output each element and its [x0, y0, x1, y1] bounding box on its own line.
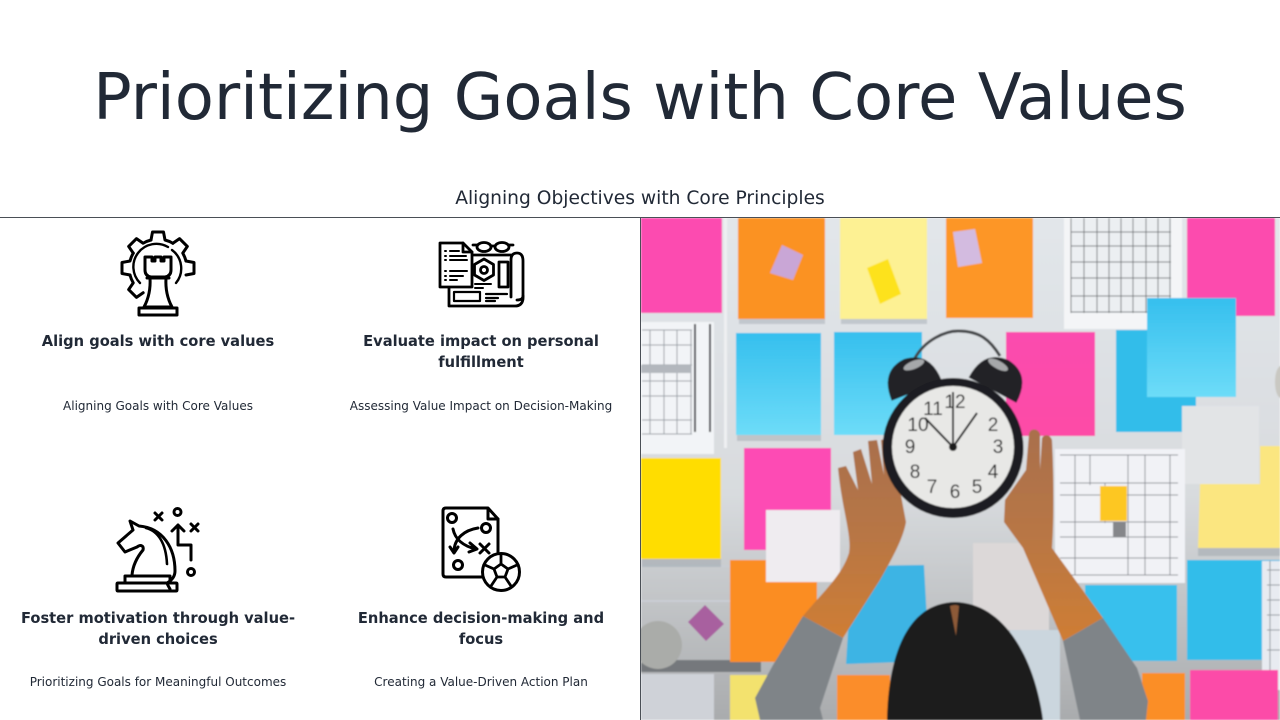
clock numerals: 9: [905, 437, 915, 458]
clock hands: [925, 392, 977, 447]
note: blue bottom: [1085, 585, 1177, 661]
description: enhance decisions: Creating a Value-Driven Action Plan: [374, 675, 588, 689]
heading: evaluate impact: fulfillment: [438, 354, 524, 371]
note: blue 2: [834, 332, 922, 435]
yarn ball: [634, 621, 682, 669]
clock numerals: 11: [923, 399, 943, 420]
description: evaluate impact: Assessing Value Impact on Decision-Making: [350, 399, 612, 413]
title: Prioritizing Goals with Core Values: [93, 61, 1187, 135]
clock numerals: 5: [972, 477, 982, 498]
icon: document and blueprint: [440, 242, 523, 306]
note: blue 1: [736, 333, 821, 435]
note: pink bottom: [1190, 670, 1278, 720]
right arm: [1004, 430, 1103, 641]
heading: foster motivation: [21, 610, 295, 648]
heading: align goals: Align goals with core values: [42, 333, 274, 350]
clock face: [892, 386, 1014, 508]
note: blue right: [1187, 560, 1280, 660]
icon: chess knight with strategy marks: [117, 508, 198, 591]
panel: align goals: [42, 333, 274, 413]
heading: evaluate impact: [363, 333, 599, 371]
clock numerals: 12: [944, 392, 966, 413]
small purple note 2: [953, 229, 982, 267]
note: orange bottom right: [1142, 673, 1185, 720]
wall background: [641, 218, 1280, 720]
note: yellow top: [840, 218, 927, 319]
small purple note: [770, 245, 803, 280]
clock numerals: 8: [910, 462, 920, 483]
calendar middle: [1055, 449, 1185, 583]
icon: tactics sheet with football: [443, 508, 520, 590]
note: blue 3: [1116, 330, 1196, 432]
right sleeve: [1063, 618, 1148, 720]
left bell: [879, 349, 942, 401]
small yellow note: [867, 259, 901, 304]
clock numerals: 6: [950, 482, 960, 503]
note: pink middle: [1006, 332, 1095, 436]
yarn right edge: [1275, 366, 1280, 398]
calendar right: [1262, 561, 1280, 690]
panel: foster motivation: [21, 610, 295, 689]
heading: enhance decisions: focus: [459, 631, 503, 648]
alarm clock: [879, 331, 1032, 518]
right bell: [969, 347, 1032, 403]
sheet under head: [1010, 630, 1060, 720]
clock numerals: 4: [988, 462, 999, 483]
note: white lower: [973, 543, 1049, 630]
note: yellow right: [1198, 446, 1280, 548]
note: gray white: [1182, 406, 1259, 484]
clock numerals: [905, 392, 1003, 503]
heading: evaluate impact: Evaluate impact on personal: [363, 333, 599, 350]
note: yellow bottom: [730, 675, 767, 720]
note: orange lower: [730, 560, 817, 662]
note: orange top: [738, 218, 825, 319]
head hair: [887, 602, 1043, 720]
calendar left: [641, 322, 714, 454]
note shadows: [642, 318, 1280, 567]
note: orange bottom: [837, 675, 890, 720]
heading: enhance decisions: Enhance decision-making and: [358, 610, 604, 627]
note: blue curved: [846, 565, 927, 664]
note: orange top 2: [946, 218, 1033, 318]
clock numerals: 10: [907, 415, 929, 436]
panel: evaluate impact: [350, 333, 612, 413]
heading: foster motivation: Foster motivation through value-: [21, 610, 295, 627]
description: align goals: Aligning Goals with Core Values: [63, 399, 253, 413]
heading: foster motivation: driven choices: [98, 631, 218, 648]
clock numerals: 3: [993, 437, 1003, 458]
note: pink top right: [1187, 218, 1275, 316]
note: blue 4: [1147, 298, 1236, 397]
subtitle: Aligning Objectives with Core Principles: [455, 188, 825, 209]
clock body: [882, 378, 1024, 518]
white bottom left: [641, 674, 714, 720]
photo: sticky notes and alarm clock: [641, 218, 1280, 720]
note: yellow left: [641, 458, 721, 559]
description: foster motivation: Prioritizing Goals for Meaningful Outcomes: [30, 675, 286, 689]
note: pink top left: [641, 218, 722, 313]
heading: enhance decisions: [358, 610, 604, 648]
clock handle: [915, 331, 1000, 358]
note: pink 2: [744, 448, 831, 550]
purple note lower: [688, 605, 724, 641]
icon: chess rook in gear: [122, 232, 194, 315]
clock numerals: 2: [988, 415, 998, 436]
left sleeve: [755, 616, 843, 720]
note: white: [766, 510, 840, 582]
panel: enhance decisions: [358, 610, 604, 689]
clock numerals: 7: [927, 477, 937, 498]
grid paper top: [1064, 218, 1182, 329]
left arm: [803, 438, 906, 638]
small yellow note on calendar: [1100, 486, 1127, 521]
